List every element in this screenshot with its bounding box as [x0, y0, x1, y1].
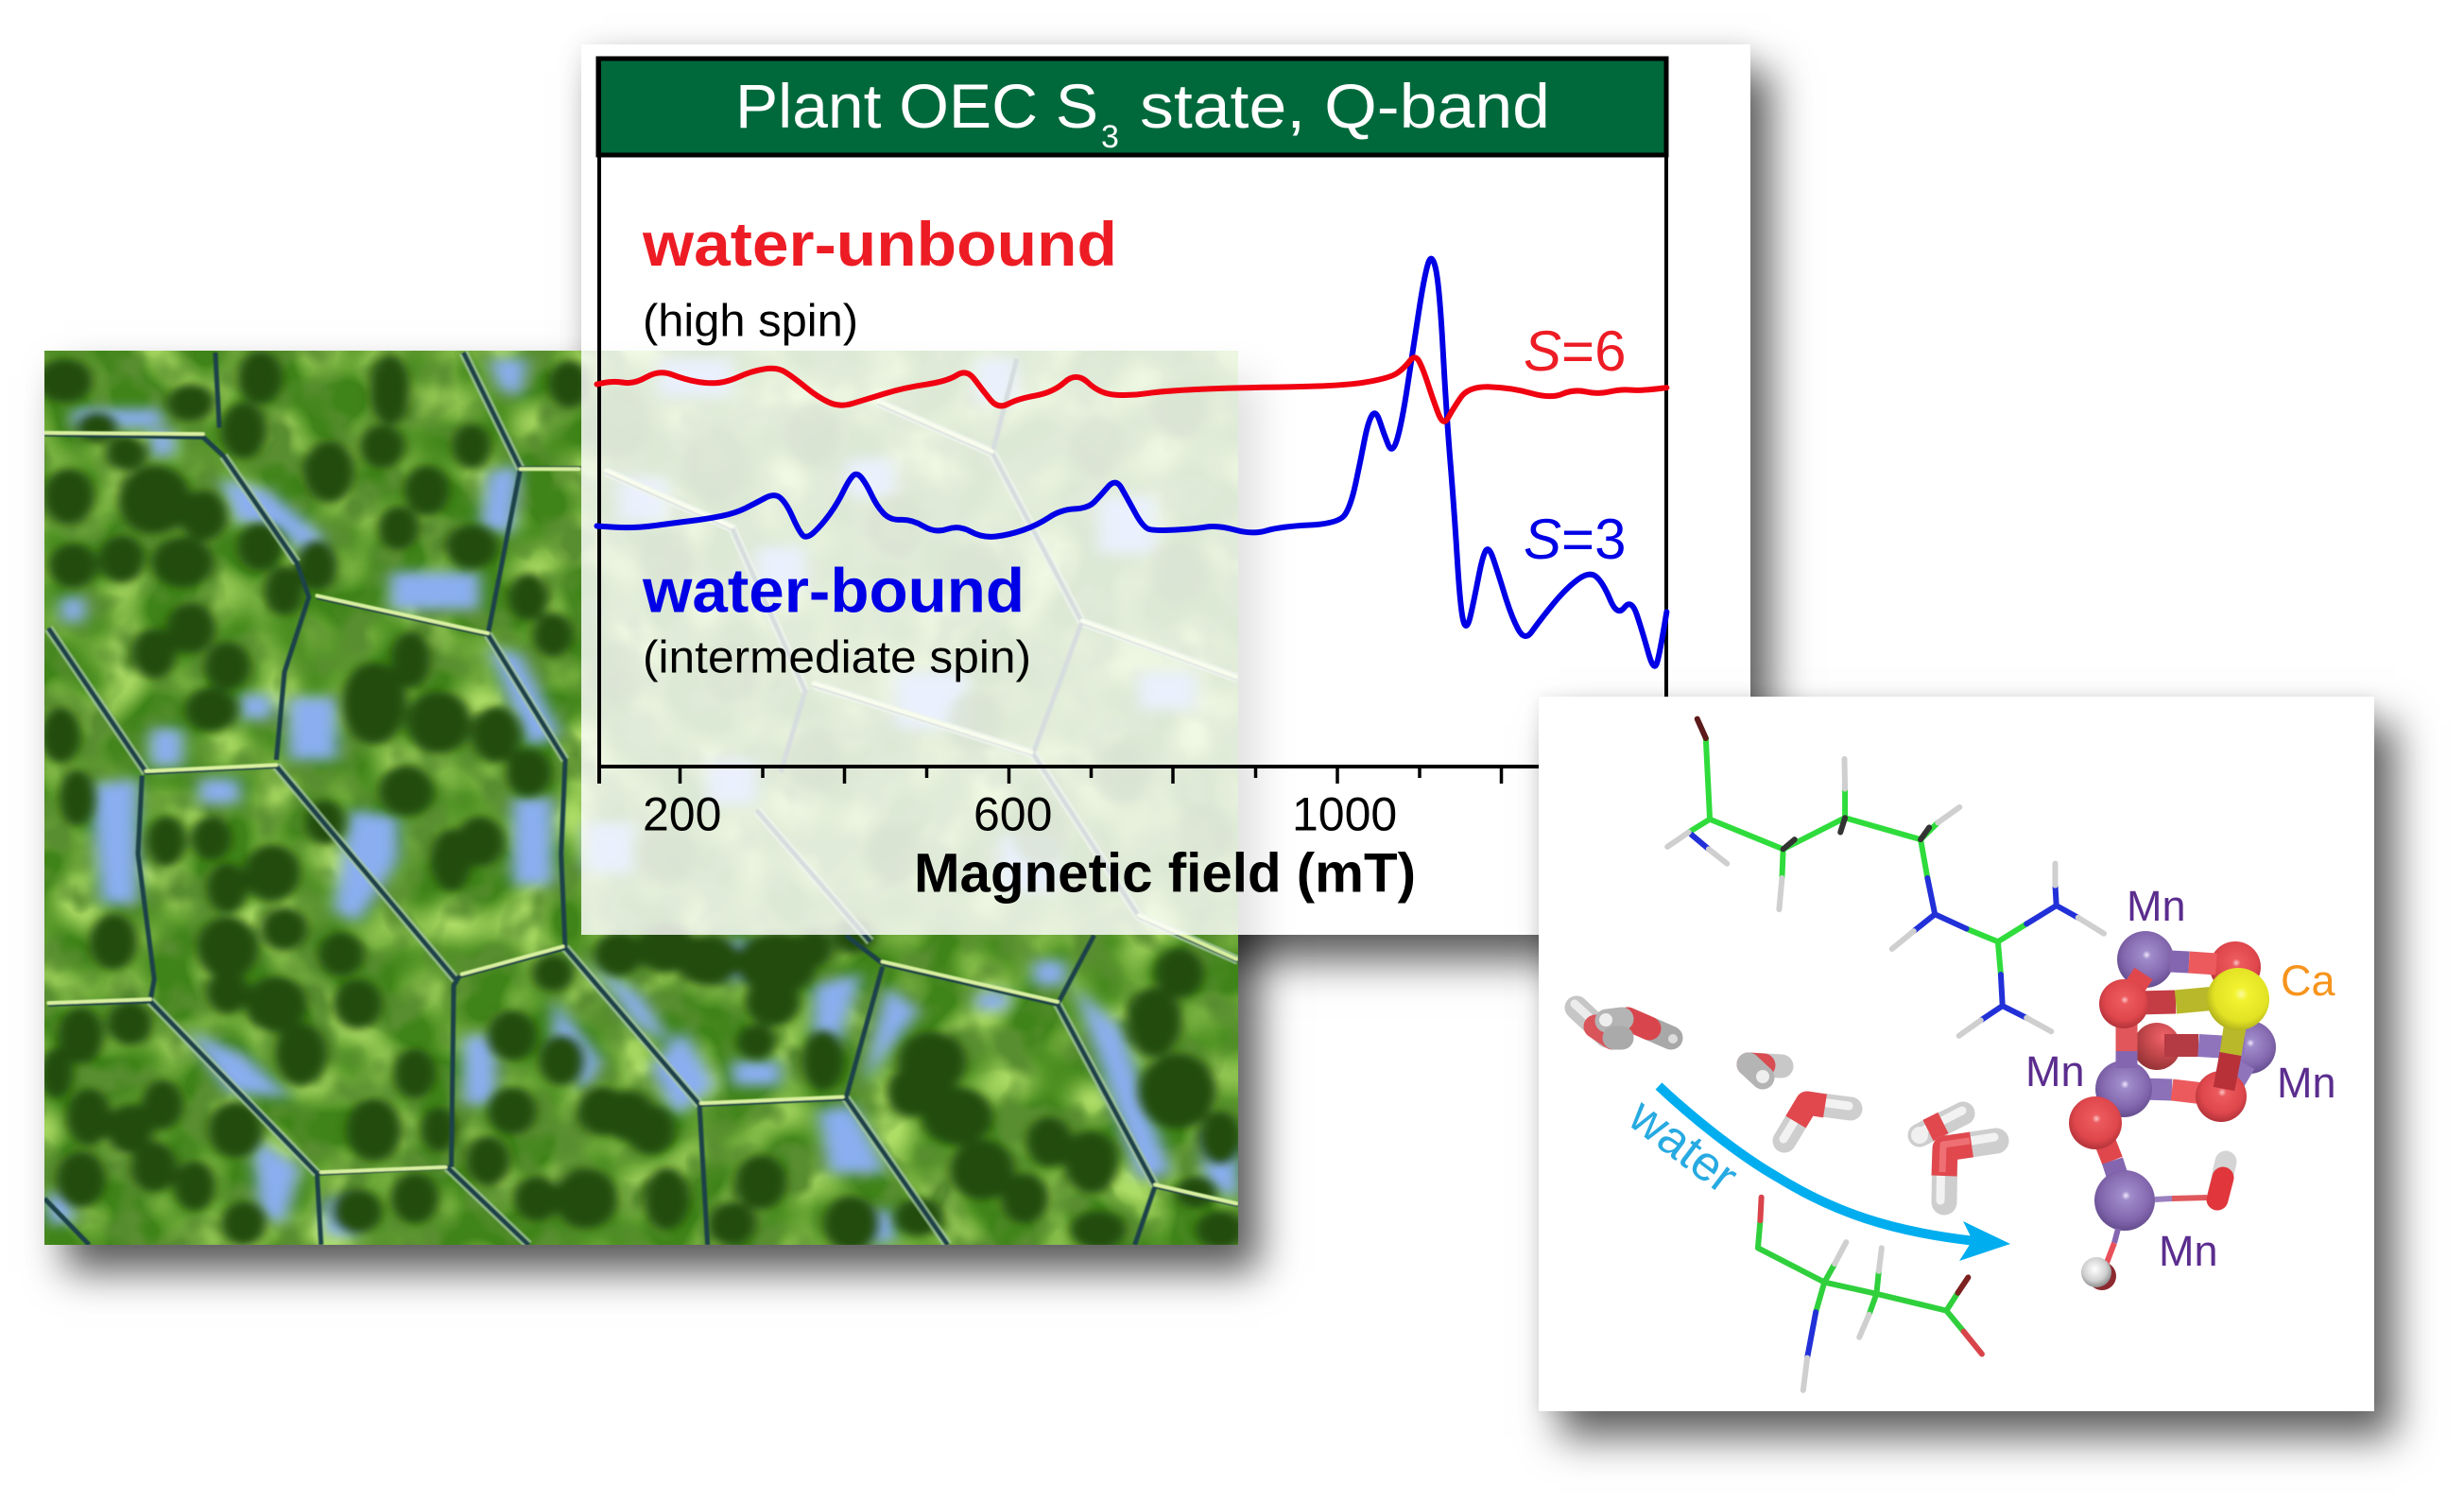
- panel: spectrum card backing: [581, 44, 1750, 935]
- series label: water-unbound: water-unbound: [642, 209, 1117, 279]
- water molecule 2: [1749, 1064, 1782, 1083]
- water molecule 3: [1783, 1100, 1851, 1141]
- axis tick labels: 200: [643, 788, 721, 841]
- red trace: S=6: [597, 357, 1666, 422]
- axis tick labels: 600: [974, 788, 1052, 841]
- water molecule 4: [1911, 1111, 1963, 1144]
- series label: water-bound: water-bound: [642, 556, 1025, 626]
- axis tick labels: [643, 788, 1397, 841]
- label: water: water: [1618, 1088, 1748, 1204]
- spin label S=6: S=6: [1524, 319, 1626, 383]
- water flow arrow: [1659, 1086, 2010, 1261]
- label: Mn top: Mn: [2127, 882, 2186, 930]
- water molecule 5: [1940, 1137, 1996, 1202]
- label: Mn left: Mn: [2025, 1047, 2085, 1096]
- chart title bar: 3: [1101, 119, 1119, 155]
- series label: water-unbound: [642, 209, 1117, 346]
- chart title bar: [598, 59, 1666, 155]
- photo: plant leaf cells with chloroplasts: [44, 351, 1238, 1245]
- axis tick labels: 1000: [1292, 788, 1397, 841]
- panel: translucent spectrum card veil: [581, 44, 1750, 935]
- series label: water-bound: (intermediate spin): [643, 633, 1031, 682]
- chart title bar: state, Q-band: [1140, 71, 1550, 141]
- label: Mn right: Mn: [2277, 1059, 2336, 1107]
- series label: water-unbound: (high spin): [643, 297, 858, 346]
- spin label S=3: S=3: [1524, 508, 1626, 571]
- blue trace: S=3: [597, 259, 1666, 666]
- water molecule 1: [1575, 1004, 1678, 1044]
- chart frame and axis: [597, 59, 1666, 784]
- label: Ca: Ca: [2281, 957, 2335, 1005]
- axis label: Magnetic field (mT): [914, 843, 1416, 904]
- chart title bar: Plant OEC S: [735, 71, 1098, 141]
- label: Mn bottom: Mn: [2159, 1227, 2218, 1275]
- Mn4CaO5 cluster: [2069, 931, 2276, 1290]
- arginine side chain sticks: [1667, 719, 2104, 1036]
- series label: water-bound: [642, 556, 1031, 682]
- glutamate side chain sticks: [1758, 1198, 1982, 1390]
- panel: molecular structure card: [1539, 697, 2374, 1411]
